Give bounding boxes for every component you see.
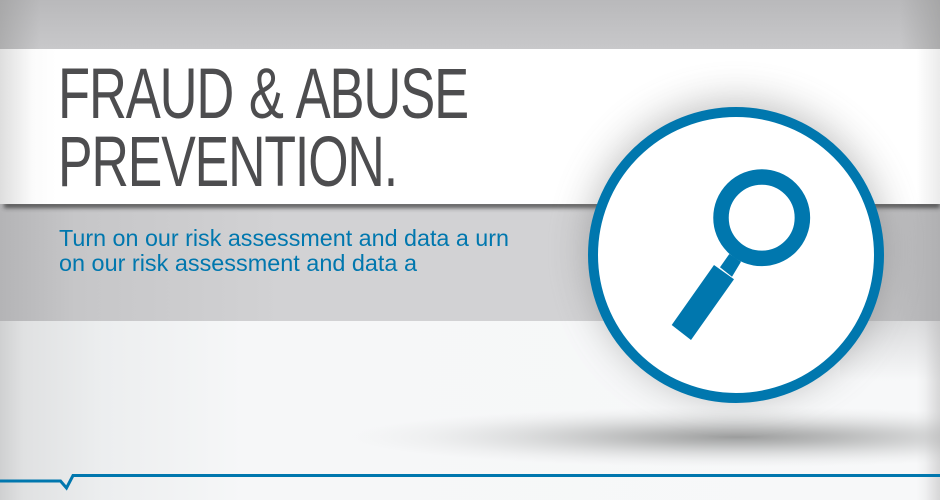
right edge fade over shadow [925,321,940,500]
magnifier badge [588,102,884,398]
subtitle: Turn on our risk assessment and data a urn [59,225,509,251]
title [58,55,468,202]
top grey band [0,0,940,49]
white band shadow [4,202,940,208]
subtitle [59,225,509,276]
icon: magnifying glass [672,177,802,340]
middle grey band [0,204,940,321]
badge circle [593,112,879,398]
badge shadow [588,102,884,398]
title: PREVENTION. [58,123,397,202]
baseline with check mark [0,476,940,488]
ground shadow [348,407,940,467]
lower light panel [0,321,940,500]
title: FRAUD & ABUSE [58,55,468,134]
subtitle: on our risk assessment and data a [59,250,417,276]
white title band [0,49,940,204]
